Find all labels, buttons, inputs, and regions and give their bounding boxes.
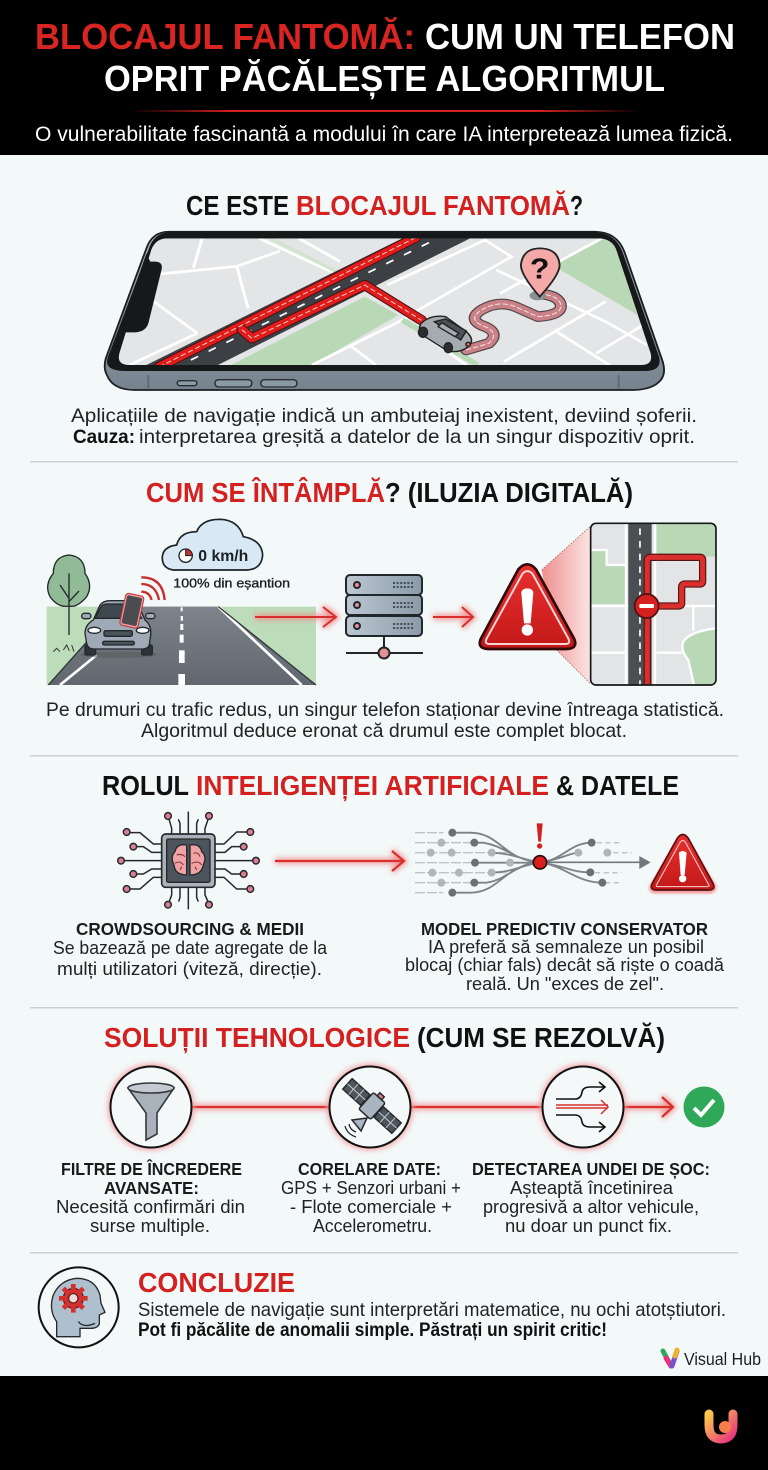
text block: filtre: surse multiple.	[90, 1216, 210, 1236]
icon: question pin	[521, 248, 560, 300]
text block: corelare: Accelerometru.	[313, 1216, 432, 1236]
road scene with car and phone	[47, 519, 316, 685]
heading: rolul AI: & DATELE	[556, 770, 679, 801]
icon: funnel	[108, 1064, 194, 1150]
text block: intro: Cauza:	[73, 426, 135, 448]
conclusion	[138, 1267, 726, 1341]
icon: warning triangle	[480, 564, 575, 649]
text block: intro	[71, 405, 697, 448]
logo: Visual Hub: Visual Hub	[684, 1349, 761, 1369]
icon: question pin: ?	[530, 254, 549, 285]
text block: corelare: - Flote comerciale +	[290, 1197, 452, 1217]
text block: model predictiv	[405, 919, 725, 994]
icon: shock wave arrows	[540, 1064, 626, 1150]
header band	[0, 0, 768, 155]
icon: satellite	[327, 1064, 413, 1150]
text block: crowdsourcing: Se bazează pe date agregate de la	[53, 938, 328, 958]
heading: solutii	[104, 1022, 665, 1053]
arrow	[275, 851, 404, 871]
text block: intro: interpretarea greșită a datelor de la un singur dispozitiv oprit.	[139, 426, 695, 448]
icon: warning triangle	[651, 834, 714, 890]
text block: model predictiv: IA preferă să semnaleze un posibil	[428, 937, 704, 957]
warning triangle with zoomed map	[480, 523, 716, 685]
caption: 100% din eșantion	[173, 576, 290, 591]
footer band	[0, 1376, 768, 1470]
title: BLOCAJUL FANTOMĂ:	[35, 16, 415, 57]
text block: corelare	[281, 1159, 461, 1236]
timeline connector arrow	[190, 1097, 673, 1117]
text block: crowdsourcing: CROWDSOURCING & MEDII	[76, 919, 304, 939]
text block: model predictiv: reală. Un "exces de zel".	[466, 974, 664, 994]
text block: detectarea: nu doar un punct fix.	[505, 1216, 672, 1236]
heading: rolul AI	[102, 770, 679, 801]
text block: filtre: Necesită confirmări din	[56, 1197, 245, 1217]
text block: detectarea: DETECTAREA UNDEI DE ȘOC:	[472, 1159, 710, 1179]
heading: cum se intampla	[146, 477, 633, 508]
text block: detectarea: Așteaptă încetinirea	[510, 1178, 674, 1198]
conclusion: Pot fi păcălite de anomalii simple. Păstrați un spirit critic!	[138, 1319, 607, 1341]
cloud	[162, 519, 263, 570]
text block: model predictiv: MODEL PREDICTIV CONSERVATOR	[421, 919, 708, 939]
heading: cum se intampla: ? (ILUZIA DIGITALĂ)	[385, 477, 633, 508]
text block: crowdsourcing	[53, 919, 328, 979]
text block: detectarea	[472, 1159, 710, 1236]
icon: wifi signal	[141, 577, 165, 600]
heading: rolul AI: ROLUL	[102, 770, 189, 801]
arrow	[433, 607, 473, 627]
icon: green check	[684, 1086, 724, 1128]
icon: tree	[48, 555, 90, 652]
text block: crowdsourcing: mulți utilizatori (viteză, direcție).	[57, 959, 322, 979]
text block: model predictiv: blocaj (chiar fals) decât să riște o coadă	[405, 955, 725, 975]
text block: detectarea: progresivă a altor vehicule,	[483, 1197, 699, 1217]
title: CUM UN TELEFON	[425, 16, 735, 57]
subtitle: O vulnerabilitate fascinantă a modului în care IA interpretează lumea fizică.	[35, 122, 733, 146]
text block: explanation	[46, 699, 724, 742]
cloud: 0 km/h	[198, 548, 248, 565]
conclusion: CONCLUZIE	[138, 1267, 295, 1298]
heading: ce este: ?	[570, 190, 583, 221]
phone illustration	[105, 232, 664, 390]
logo: U mark	[709, 1414, 733, 1439]
text block: intro: Aplicațiile de navigație indică un ambuteiaj inexistent, deviind șoferii.	[71, 405, 697, 427]
map panel	[591, 523, 716, 685]
text block: explanation: Pe drumuri cu trafic redus, un singur telefon staționar devine întreaga statistică.	[46, 699, 724, 721]
icon: server	[346, 575, 423, 658]
icon: car front	[80, 601, 157, 658]
text block: filtre: FILTRE DE ÎNCREDERE	[61, 1158, 242, 1179]
arrow	[255, 607, 336, 627]
heading: ce este: CE ESTE	[186, 190, 289, 221]
title: OPRIT PĂCĂLEȘTE ALGORITMUL	[104, 58, 665, 99]
heading: rolul AI: INTELIGENȚEI ARTIFICIALE	[196, 770, 549, 801]
icon: head with gear	[39, 1267, 119, 1347]
heading: solutii: SOLUȚII TEHNOLOGICE	[104, 1022, 410, 1053]
chart: data funnel	[415, 823, 714, 897]
icon: car	[419, 316, 472, 353]
heading: cum se intampla: CUM SE ÎNTÂMPLĂ	[146, 477, 385, 508]
text block: filtre	[56, 1158, 245, 1236]
text block: filtre: AVANSATE:	[104, 1178, 199, 1198]
icon: AI chip with brain	[118, 812, 259, 909]
heading: ce este: BLOCAJUL FANTOMĂ	[296, 190, 570, 221]
conclusion: Sistemele de navigație sunt interpretări matematice, nu ochi atotștiutori.	[138, 1299, 726, 1321]
text block: explanation: Algoritmul deduce eronat că drumul este complet blocat.	[141, 720, 627, 742]
title	[35, 16, 735, 99]
heading: solutii: (CUM SE REZOLVĂ)	[417, 1022, 665, 1053]
icon: phone	[119, 593, 144, 629]
text block: corelare: CORELARE DATE:	[298, 1159, 441, 1179]
text block: corelare: GPS + Senzori urbani +	[281, 1178, 461, 1198]
